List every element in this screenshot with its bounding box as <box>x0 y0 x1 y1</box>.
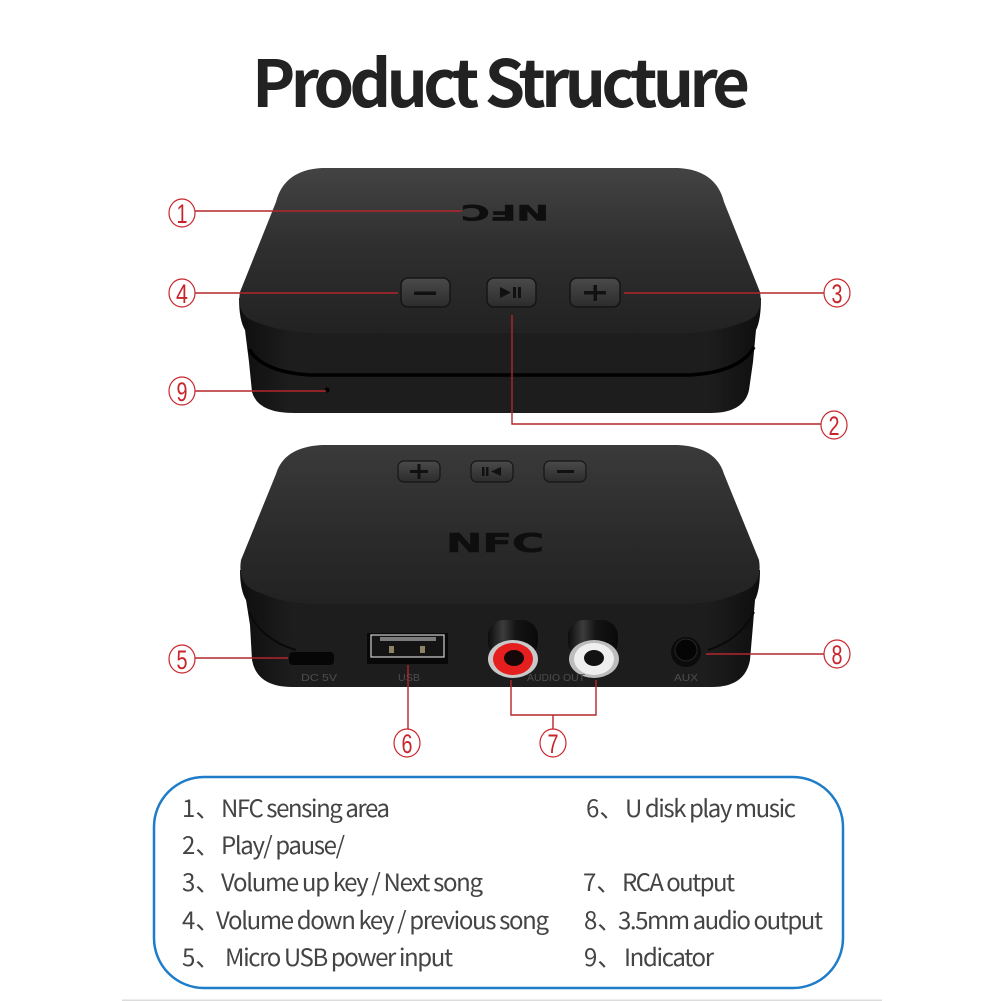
legend left column: Volume up key / Next song <box>221 863 483 898</box>
port: RCA white <box>568 620 619 678</box>
callout 1 <box>169 199 462 229</box>
callout 8 <box>706 640 850 670</box>
legend left column: Micro USB power input <box>225 938 453 973</box>
label: NFC mirrored on lid: NFC <box>461 200 549 224</box>
label: AUX: AUX <box>674 673 698 684</box>
callout 5: 5 <box>176 645 188 675</box>
callout 9 <box>169 377 326 407</box>
legend right column: 6、 <box>586 789 623 824</box>
indicator hole <box>324 388 330 392</box>
callout 7: 7 <box>548 729 558 759</box>
legend right column: 8、 <box>584 901 621 936</box>
label: AUDIO OUT: AUDIO OUT <box>527 673 585 684</box>
legend right column: 3.5mm audio output <box>618 901 823 936</box>
callout 6: 6 <box>402 729 412 759</box>
device: front view with ports <box>240 445 760 687</box>
button: plus <box>570 278 620 307</box>
legend right column: U disk play music <box>625 789 796 824</box>
label: USB: USB <box>398 673 420 684</box>
port: AUX jack <box>671 637 701 667</box>
callout 3: 3 <box>832 279 842 309</box>
legend left column <box>182 789 549 973</box>
callout 9: 9 <box>176 377 188 407</box>
callout 4: 4 <box>176 279 188 309</box>
legend left column: 2、 <box>182 826 219 861</box>
button: minus <box>544 461 586 482</box>
legend right column: Indicator <box>624 938 715 973</box>
button: play pause <box>487 278 536 307</box>
device: top view with buttons <box>239 168 761 413</box>
button: plus <box>398 461 440 482</box>
callout 5 <box>169 645 288 675</box>
button: previous <box>471 461 513 482</box>
legend left column: 3、 <box>182 863 219 898</box>
legend left column: Play/ pause/ <box>221 826 346 861</box>
legend panel <box>154 777 843 988</box>
callout 8: 8 <box>832 640 842 670</box>
title: Product Structure <box>252 32 750 126</box>
port: micro USB <box>289 652 334 665</box>
legend left column: 4、 <box>182 901 219 936</box>
port: USB <box>367 633 448 664</box>
legend right column: 9、 <box>584 938 621 973</box>
callout 4 <box>169 279 398 309</box>
label: NFC: NFC <box>446 529 544 559</box>
callout 6 <box>394 665 420 759</box>
legend left column: 5、 <box>182 938 219 973</box>
callout 2: 2 <box>828 411 840 441</box>
button: minus <box>401 278 450 307</box>
port: RCA red <box>488 620 538 678</box>
label: DC 5V: DC 5V <box>301 673 337 684</box>
legend right column: RCA output <box>622 863 735 898</box>
callout 1: 1 <box>176 199 188 229</box>
callout 2 <box>512 315 847 441</box>
legend left column: Volume down key / previous song <box>216 901 549 936</box>
legend right column <box>583 789 823 973</box>
legend right column: 7、 <box>583 863 620 898</box>
callout 3 <box>624 279 850 309</box>
callout 7 <box>511 680 596 759</box>
legend left column: 1、 <box>182 789 219 824</box>
legend left column: NFC sensing area <box>221 789 390 824</box>
